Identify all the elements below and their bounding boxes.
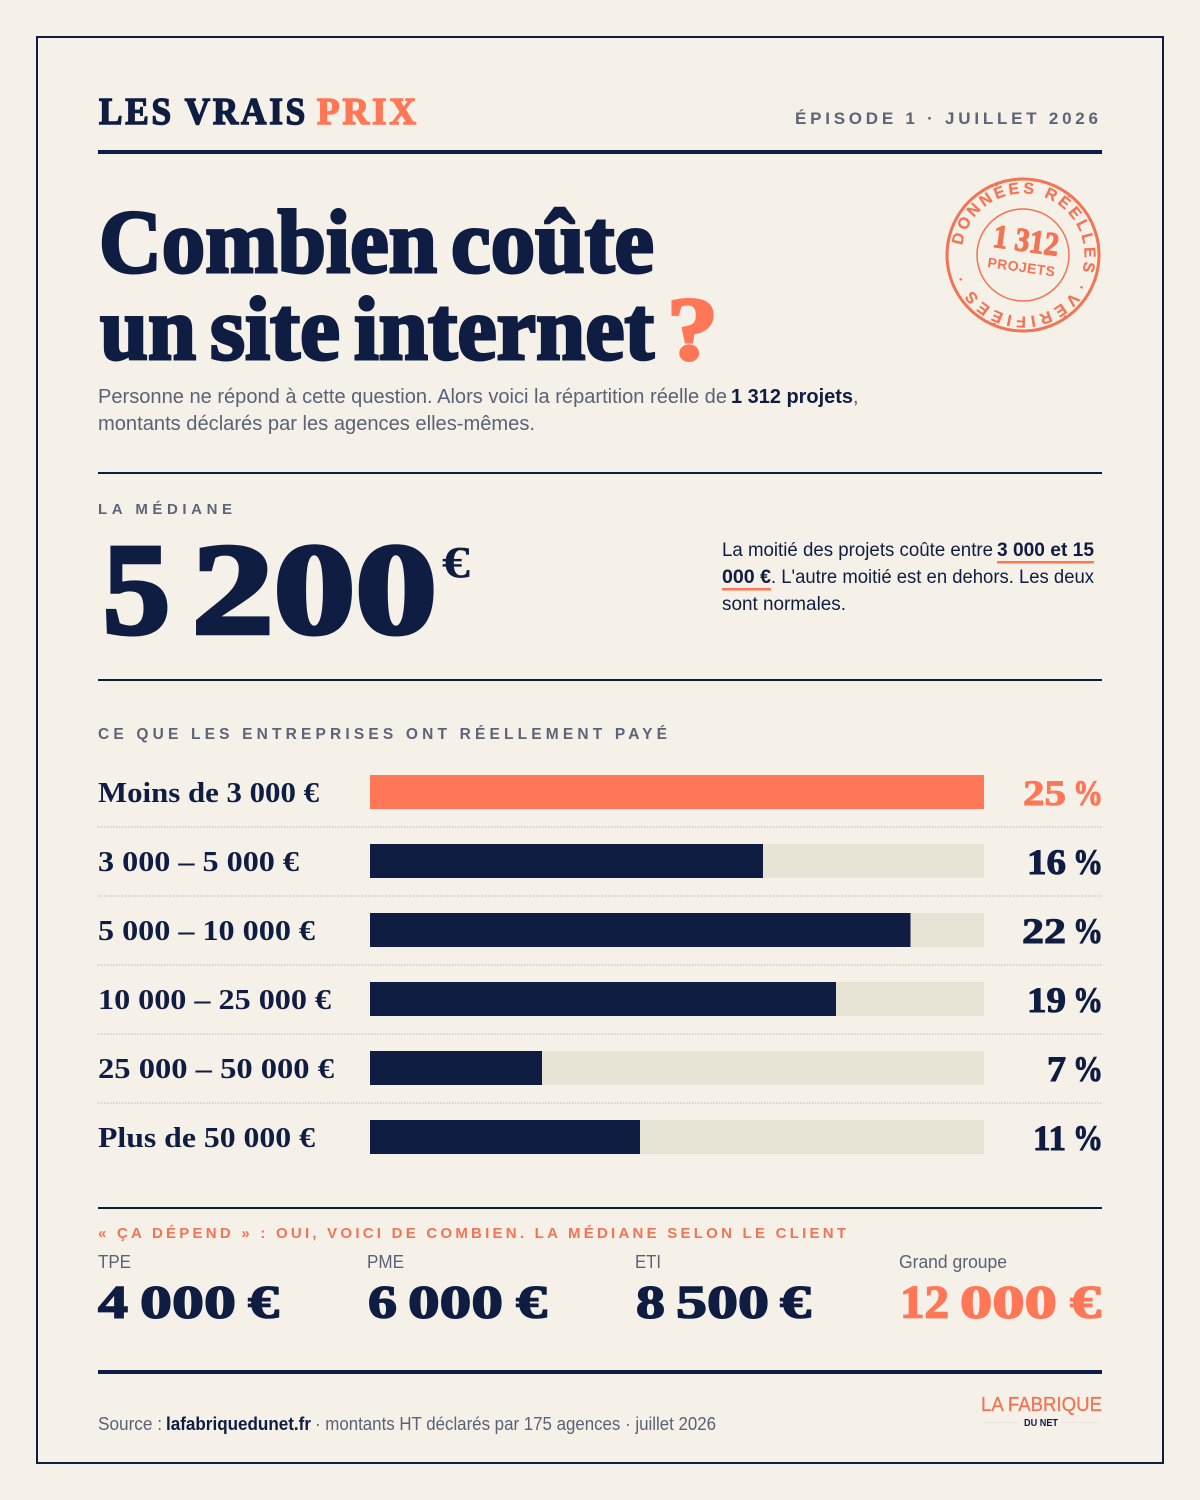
bar row: 5000 to 10000: % bbox=[1073, 911, 1103, 951]
client: TPE: TPE bbox=[98, 1252, 131, 1272]
bar row: 25000 to 50000 bbox=[98, 1049, 1103, 1089]
client: PME bbox=[367, 1252, 547, 1328]
client section heading: « ÇA DÉPEND » : OUI, VOICI DE COMBIEN. LA MÉDIANE SELON LE CLIENT bbox=[98, 1225, 846, 1242]
intro text bbox=[98, 386, 859, 435]
bar row: 25000 to 50000: 25 000 – 50 000 € bbox=[98, 1053, 335, 1085]
series title: PRIX bbox=[317, 91, 419, 133]
client: TPE: € bbox=[248, 1276, 279, 1328]
median block bbox=[98, 501, 1094, 662]
bar row: more than 50000: 11 bbox=[1033, 1118, 1066, 1158]
bar row: less than 3000: Moins de 3 000 € bbox=[98, 777, 320, 809]
main title: coûte bbox=[451, 193, 654, 292]
bar row: more than 50000 bbox=[98, 1118, 1103, 1158]
source line: · montants HT déclarés par 175 agences · juillet 2026 bbox=[315, 1414, 716, 1434]
median explanation: sont normales. bbox=[722, 594, 846, 615]
bar row: 3000 to 5000: 3 000 – 5 000 € bbox=[98, 846, 300, 878]
stamp: verified data: DONNÉES RÉELLES bbox=[952, 182, 1096, 272]
main title: site bbox=[210, 280, 340, 379]
client: PME: 000 bbox=[408, 1276, 503, 1328]
main title: internet bbox=[354, 280, 654, 379]
bar row: less than 3000: 25 bbox=[1023, 773, 1066, 813]
client: ETI: ETI bbox=[635, 1252, 661, 1272]
bar row: 25000 to 50000: % bbox=[1073, 1049, 1103, 1089]
client: large group: 12 bbox=[900, 1276, 949, 1328]
client: large group bbox=[899, 1252, 1101, 1328]
median explanation: . L'autre moitié est en dehors. Les deux bbox=[771, 567, 1094, 588]
bar row: 5000 to 10000: 22 bbox=[1022, 911, 1066, 951]
source line bbox=[98, 1414, 716, 1434]
client: ETI bbox=[635, 1252, 811, 1328]
bar chart: what companies paid bbox=[98, 726, 1103, 1158]
stamp: verified data: · bbox=[959, 278, 962, 281]
main title: ? bbox=[667, 280, 718, 379]
median explanation bbox=[722, 540, 1094, 615]
main title: un bbox=[100, 280, 196, 379]
bar row: 10000 to 25000: % bbox=[1073, 980, 1103, 1020]
bar row: less than 3000: % bbox=[1073, 773, 1103, 813]
bar row: 5000 to 10000 bbox=[98, 911, 1103, 951]
bar row: 10000 to 25000: 10 000 – 25 000 € bbox=[98, 984, 332, 1016]
median explanation: 3 000 et 15 bbox=[997, 540, 1094, 561]
bar row: less than 3000 bbox=[98, 773, 1103, 813]
client: TPE: 4 bbox=[98, 1276, 128, 1328]
bar row: 10000 to 25000: 19 bbox=[1027, 980, 1066, 1020]
median value bbox=[103, 518, 470, 662]
stamp: verified data: PROJETS bbox=[987, 254, 1056, 280]
client size medians bbox=[98, 1225, 1101, 1328]
stamp: verified data: VÉRIFIÉES bbox=[966, 292, 1080, 328]
client: large group: € bbox=[1070, 1276, 1101, 1328]
bar row: more than 50000: Plus de 50 000 € bbox=[98, 1122, 316, 1154]
stamp: verified data bbox=[946, 178, 1100, 332]
median explanation: 000 € bbox=[722, 567, 771, 588]
intro text: Personne ne répond à cette question. Alors voici la répartition réelle de bbox=[98, 386, 727, 408]
client: PME: 6 bbox=[368, 1276, 397, 1328]
bar row: 25000 to 50000: 7 bbox=[1047, 1049, 1066, 1089]
client: ETI: 8 bbox=[636, 1276, 665, 1328]
source line: Source : bbox=[98, 1414, 162, 1434]
bar row: 3000 to 5000: % bbox=[1073, 842, 1103, 882]
source line: lafabriquedunet.fr bbox=[166, 1414, 311, 1434]
intro text: , bbox=[853, 386, 859, 408]
bar row: 3000 to 5000: 16 bbox=[1027, 842, 1066, 882]
main title bbox=[99, 193, 718, 379]
client: PME: PME bbox=[367, 1252, 404, 1272]
logo: La Fabrique du Net: LA FABRIQUE bbox=[981, 1394, 1102, 1416]
bar row: 5000 to 10000: 5 000 – 10 000 € bbox=[98, 915, 316, 947]
median explanation: La moitié des projets coûte entre bbox=[722, 540, 993, 561]
logo: La Fabrique du Net bbox=[981, 1394, 1102, 1429]
median label: LA MÉDIANE bbox=[98, 501, 232, 518]
bar row: 10000 to 25000 bbox=[98, 980, 1103, 1020]
stamp: verified data: 1 312 bbox=[991, 219, 1061, 264]
client: large group: Grand groupe bbox=[899, 1252, 1007, 1272]
client: PME: € bbox=[516, 1276, 547, 1328]
client: large group: 000 bbox=[960, 1276, 1057, 1328]
bar row: more than 50000: % bbox=[1073, 1118, 1103, 1158]
intro text: 1 312 projets bbox=[731, 386, 853, 408]
bar row: 3000 to 5000 bbox=[98, 842, 1103, 882]
main title: Combien bbox=[99, 193, 437, 292]
header bbox=[99, 91, 1098, 133]
episode label: ÉPISODE 1 · JUILLET 2026 bbox=[795, 109, 1098, 128]
intro text: montants déclarés par les agences elles-mêmes. bbox=[98, 413, 535, 435]
client: TPE bbox=[98, 1252, 279, 1328]
median value: € bbox=[442, 538, 470, 587]
client: ETI: 500 bbox=[676, 1276, 769, 1328]
chart heading: CE QUE LES ENTREPRISES ONT RÉELLEMENT PAYÉ bbox=[98, 726, 667, 743]
client: TPE: 000 bbox=[140, 1276, 236, 1328]
median value: 5 bbox=[103, 518, 170, 662]
stamp: verified data: · bbox=[1080, 286, 1084, 289]
series title: LES VRAIS bbox=[99, 91, 308, 133]
logo: La Fabrique du Net: DU NET bbox=[1024, 1418, 1058, 1429]
client: ETI: € bbox=[780, 1276, 811, 1328]
median value: 200 bbox=[192, 518, 437, 662]
